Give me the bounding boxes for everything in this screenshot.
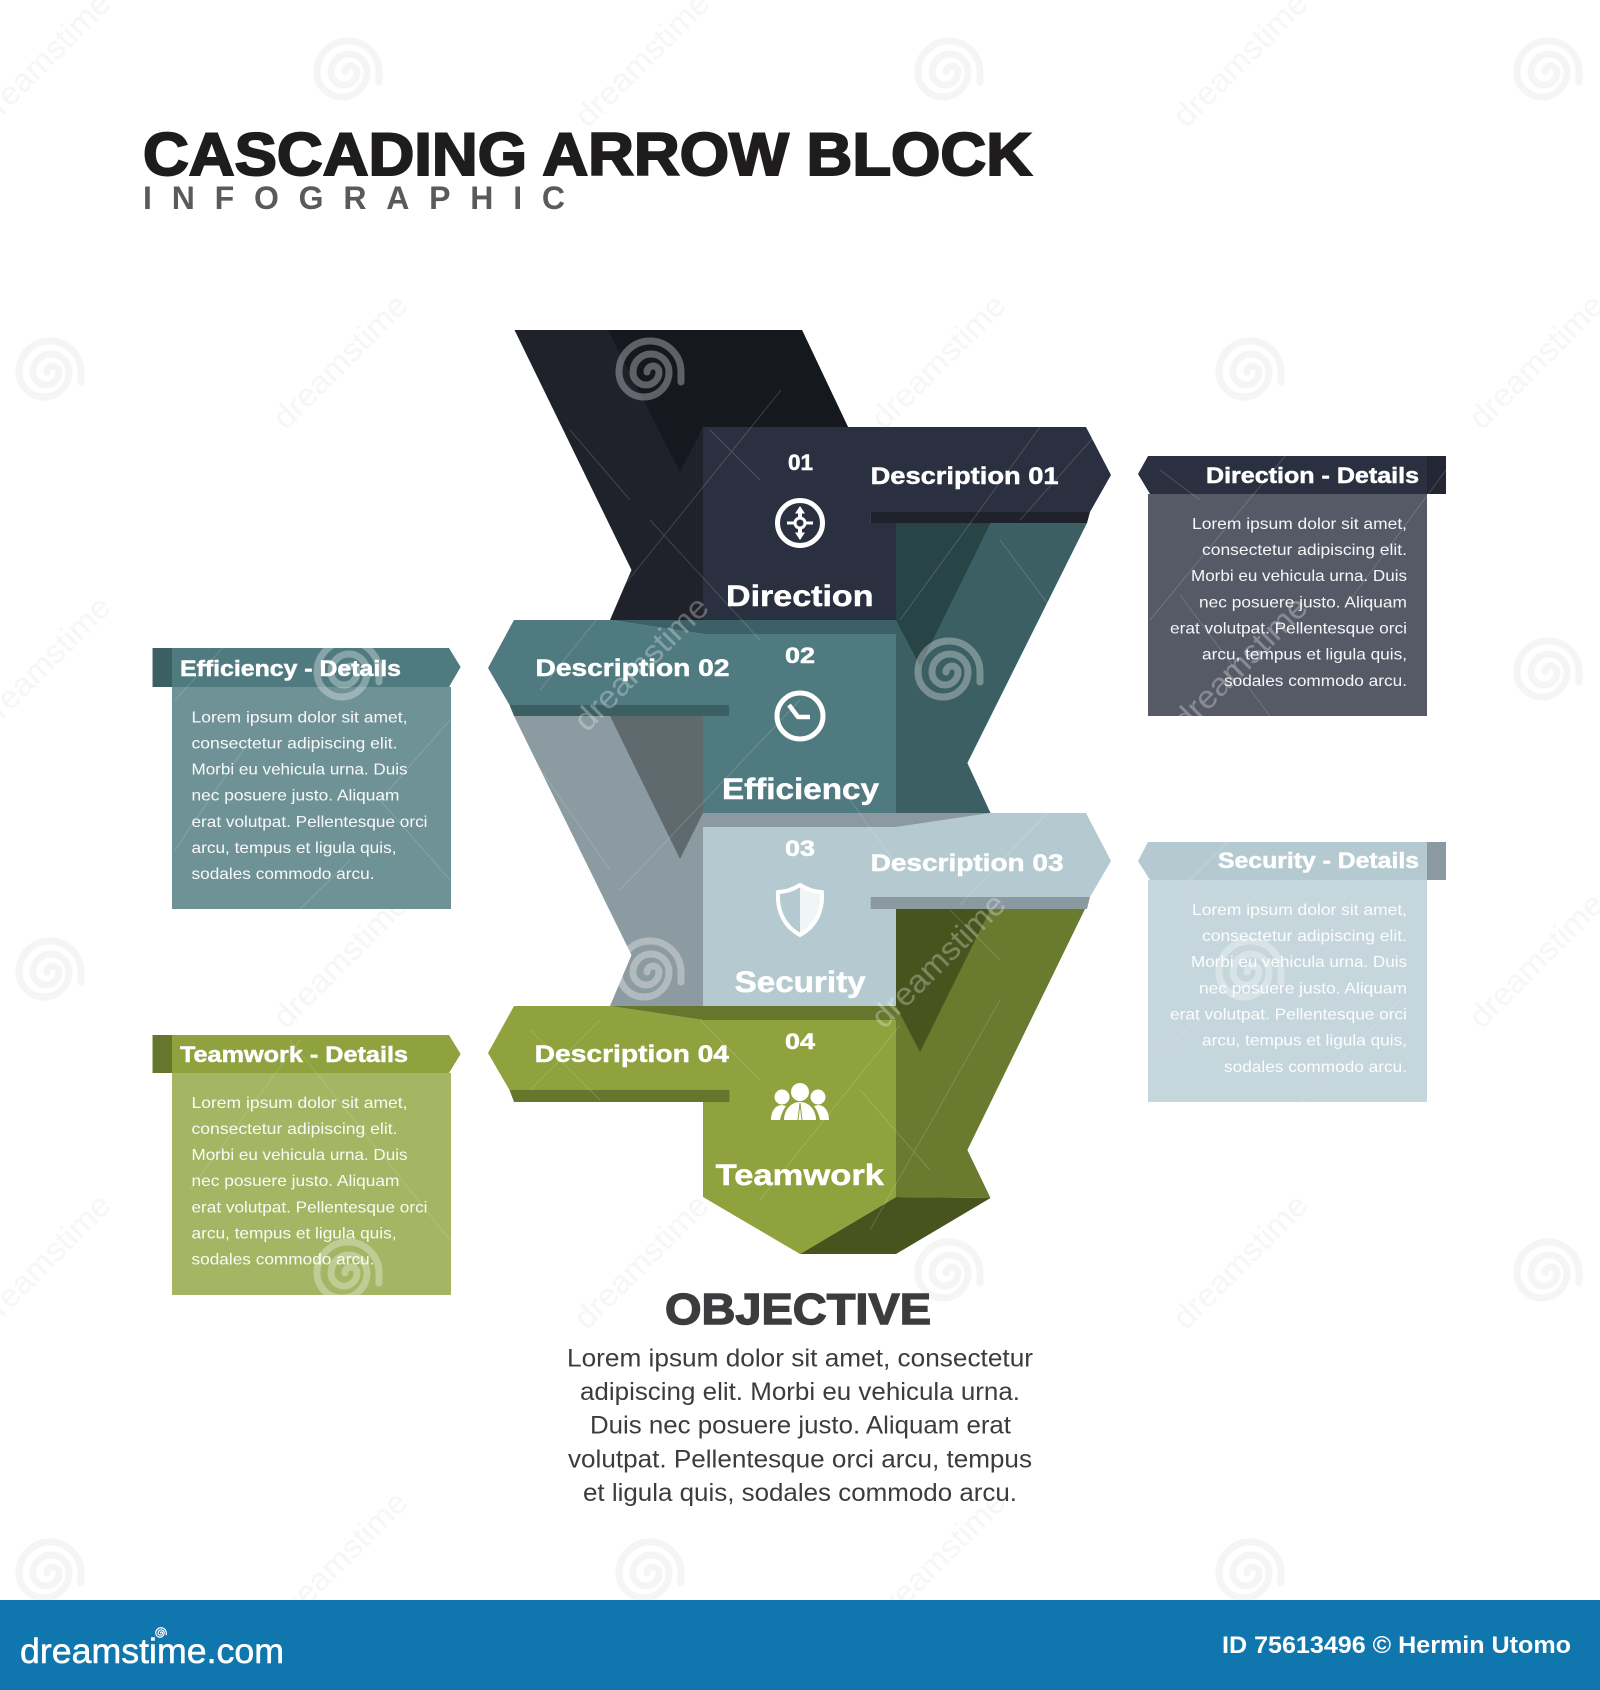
text block: Direction details: Morbi eu vehicula urna. Duis	[1191, 568, 1407, 585]
text: dreamstime	[1165, 589, 1315, 738]
panel: Security details	[1138, 842, 1446, 1102]
arrow block 01 front: Direction	[703, 427, 1111, 620]
text block: Security details: Morbi eu vehicula urna. Duis	[1191, 954, 1407, 971]
text block: Efficiency details: Morbi eu vehicula urna. Duis	[192, 762, 408, 778]
text: dreamstime	[265, 1484, 415, 1633]
label: Description 04: Description 04	[535, 1041, 730, 1068]
text block: Efficiency details: sodales commodo arcu.	[192, 866, 374, 883]
text block: Objective description	[567, 1344, 1033, 1507]
panel: Efficiency details	[153, 648, 461, 909]
objective block	[567, 1285, 1033, 1507]
text block: Security details: arcu, tempus et ligula quis,	[1202, 1032, 1407, 1050]
text block: Efficiency details: arcu, tempus et ligula quis,	[192, 840, 396, 857]
label: Description 03: Description 03	[871, 850, 1064, 877]
number 02: 02	[785, 643, 815, 668]
icon: team of people	[771, 1083, 829, 1120]
text block: Efficiency details: Lorem ipsum dolor sit amet,	[192, 710, 408, 726]
text block: Security details: consectetur adipiscing elit.	[1202, 928, 1407, 945]
arrow block 02 front: Efficiency	[488, 620, 896, 813]
text block: Teamwork details: consectetur adipiscing elit.	[192, 1121, 398, 1138]
text block: Objective description: volutpat. Pellentesque orci arcu, tempus	[568, 1446, 1032, 1474]
cascading arrow diagram	[488, 330, 1111, 1254]
text: dreamstime	[566, 589, 716, 738]
text block: Direction details: erat volutpat. Pellentesque orci	[1170, 620, 1407, 638]
text block: Teamwork details: erat volutpat. Pellentesque orci	[192, 1200, 428, 1216]
text block: Direction details: nec posuere justo. Aliquam	[1199, 594, 1407, 612]
text block: Security details: nec posuere justo. Aliquam	[1199, 980, 1407, 998]
panel: Teamwork details	[153, 1035, 461, 1295]
text block: Teamwork details: sodales commodo arcu.	[192, 1252, 374, 1268]
icon: shield	[778, 885, 822, 935]
text block: Teamwork details: Morbi eu vehicula urna. Duis	[192, 1147, 408, 1164]
text block: Efficiency details: erat volutpat. Pellentesque orci	[192, 814, 428, 831]
text block: Teamwork details: nec posuere justo. Aliquam	[192, 1173, 400, 1190]
text: dreamstime	[1165, 1187, 1315, 1336]
text block: Efficiency details: nec posuere justo. Aliquam	[192, 788, 400, 804]
text block: Security details: erat volutpat. Pellentesque orci	[1170, 1006, 1407, 1024]
text: dreamstime	[265, 886, 415, 1035]
text block: Security details	[1170, 902, 1407, 1076]
panel: Direction details	[1138, 456, 1446, 716]
text block: Direction details: Lorem ipsum dolor sit amet,	[1192, 516, 1407, 533]
label: Efficiency: Efficiency	[722, 773, 879, 806]
footer bar	[0, 1600, 1600, 1690]
arrow block 03 front: Security	[703, 813, 1111, 1006]
footer credit: ID 75613496 © Hermin Utomo	[1222, 1632, 1571, 1659]
number 03: 03	[785, 836, 815, 861]
icon: clock	[777, 693, 823, 739]
text block: Direction details: sodales commodo arcu.	[1224, 673, 1407, 690]
number 04: 04	[785, 1029, 816, 1054]
text block: Objective description: Duis nec posuere justo. Aliquam erat	[590, 1412, 1011, 1440]
text: dreamstime	[863, 886, 1013, 1035]
arrow block 03 back: grey chevron	[514, 716, 703, 1006]
footer logo: dreamstime.com: dreamstime.com	[20, 1632, 284, 1671]
label: Direction: Direction	[726, 580, 874, 613]
text block: Teamwork details	[192, 1095, 428, 1268]
arrow block 04 front: Teamwork	[488, 1006, 896, 1254]
arrow block 02 back: teal chevron	[896, 523, 1087, 813]
label: Security: Security	[735, 966, 866, 999]
text block: Objective description: Lorem ipsum dolor sit amet, consectetur	[567, 1344, 1033, 1372]
label: Teamwork: Teamwork	[716, 1159, 884, 1192]
text block: Efficiency details	[192, 710, 428, 883]
text: dreamstime	[566, 1187, 716, 1336]
heading: Direction - Details: Direction - Details	[1206, 463, 1419, 488]
text block: Security details: sodales commodo arcu.	[1224, 1059, 1407, 1076]
text block: Direction details	[1170, 516, 1407, 690]
label: Description 02: Description 02	[536, 655, 730, 682]
text block: Objective description: adipiscing elit. Morbi eu vehicula urna.	[580, 1378, 1020, 1406]
icon: compass	[778, 500, 822, 546]
text: dreamstime	[863, 287, 1013, 436]
text: dreamstime	[863, 1484, 1013, 1633]
arrow block 04 back: olive chevron	[800, 909, 1085, 1254]
title	[143, 121, 1032, 216]
heading: Efficiency - Details: Efficiency - Details	[180, 656, 401, 681]
text block: Teamwork details: Lorem ipsum dolor sit amet,	[192, 1095, 408, 1112]
text block: Direction details: consectetur adipiscing elit.	[1202, 542, 1407, 559]
heading: Teamwork - Details: Teamwork - Details	[180, 1042, 408, 1067]
text block: Efficiency details: consectetur adipiscing elit.	[192, 736, 398, 752]
title: subheading: INFOGRAPHIC	[143, 180, 565, 216]
heading: Security - Details: Security - Details	[1218, 848, 1419, 873]
text: dreamstime	[265, 287, 415, 436]
title: main heading: CASCADING ARROW BLOCK	[143, 121, 1032, 188]
text block: Security details: Lorem ipsum dolor sit amet,	[1192, 902, 1407, 919]
text block: Direction details: arcu, tempus et ligula quis,	[1202, 646, 1407, 664]
text block: Objective description: et ligula quis, sodales commodo arcu.	[583, 1479, 1017, 1507]
text block: Teamwork details: arcu, tempus et ligula quis,	[192, 1226, 396, 1242]
number 01: 01	[788, 450, 813, 475]
label: Description 01: Description 01	[871, 463, 1059, 490]
heading: Objective: OBJECTIVE	[665, 1285, 931, 1334]
arrow block 01 back: dark chevron	[514, 330, 848, 620]
